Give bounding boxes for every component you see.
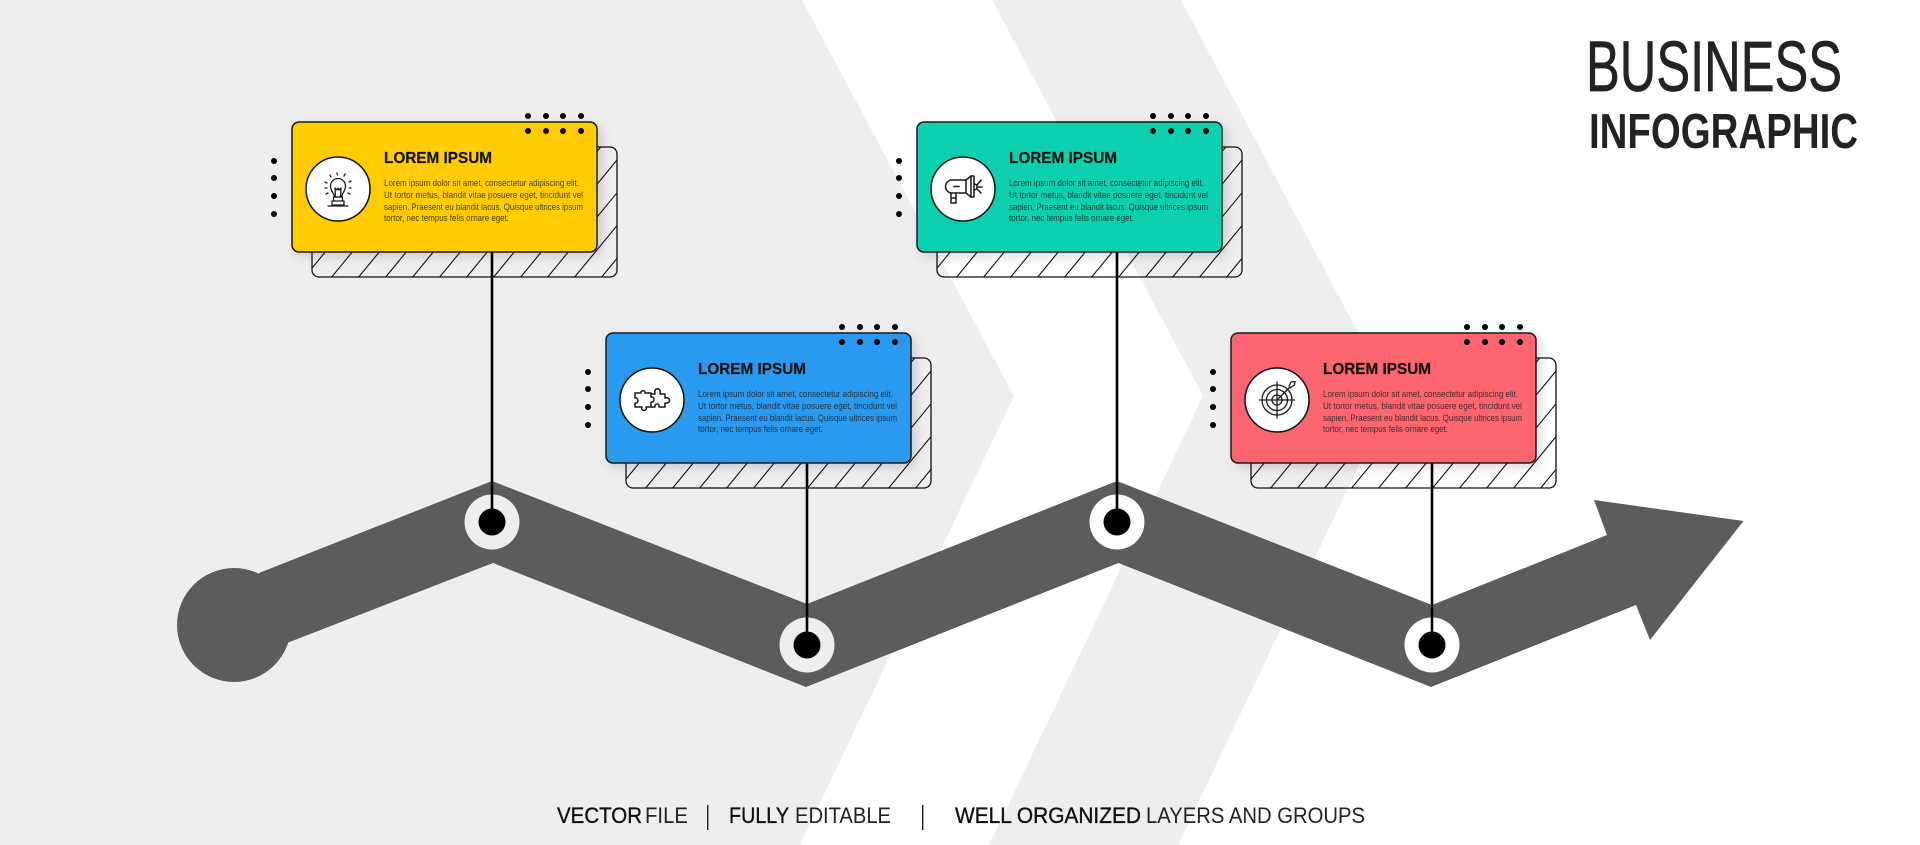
body text: Lorem ipsum dolor sit amet, consectetur adipiscing elit.	[1323, 388, 1518, 399]
footer caption	[557, 803, 1365, 830]
left dots	[585, 369, 591, 428]
left dots	[271, 158, 277, 217]
body text: sapien. Praesent eu blandit lacus. Quisque ultrices ipsum	[384, 201, 583, 212]
panel: step 1 yellow	[271, 113, 618, 278]
node 2 ring	[780, 618, 834, 672]
top dots	[1150, 113, 1209, 134]
panel: step 4 red	[1210, 324, 1557, 489]
footer caption: VECTOR	[557, 803, 642, 828]
card body	[292, 122, 597, 252]
icon: puzzle	[620, 368, 684, 432]
heading: LOREM IPSUM	[698, 361, 806, 378]
body text: sapien. Praesent eu blandit lacus. Quisque ultrices ipsum	[698, 412, 897, 423]
hatched back panel	[1250, 357, 1557, 489]
left dots	[896, 158, 902, 217]
icon: light bulb	[306, 157, 370, 221]
hatched back panel	[625, 357, 932, 489]
heading: LOREM IPSUM	[1323, 361, 1431, 378]
body text: sapien. Praesent eu blandit lacus. Quisque ultrices ipsum	[1323, 412, 1522, 423]
hatched back panel	[936, 146, 1243, 278]
body text: Ut tortor metus, blandit vitae posuere eget, tincidunt vel	[1323, 400, 1522, 411]
panel: step 2 blue	[585, 324, 932, 489]
footer caption: EDITABLE	[795, 803, 891, 828]
body text	[1009, 177, 1208, 223]
footer caption: WELL ORGANIZED	[955, 803, 1141, 828]
body text: Ut tortor metus, blandit vitae posuere eget, tincidunt vel	[698, 400, 897, 411]
heading: LOREM IPSUM	[384, 150, 492, 167]
hatched back panel	[311, 146, 618, 278]
zigzag arrow timeline	[177, 481, 1744, 687]
body text: Ut tortor metus, blandit vitae posuere eget, tincidunt vel	[1009, 189, 1208, 200]
icon: megaphone	[931, 157, 995, 221]
icon: target	[1245, 368, 1309, 432]
connector stem 3	[1104, 250, 1130, 536]
card body	[606, 333, 911, 463]
body text	[698, 388, 897, 434]
body text: Lorem ipsum dolor sit amet, consectetur adipiscing elit.	[698, 388, 893, 399]
body text: sapien. Praesent eu blandit lacus. Quisque ultrices ipsum	[1009, 201, 1208, 212]
top dots	[1464, 324, 1523, 345]
node 4 ring	[1404, 618, 1460, 672]
body text: Ut tortor metus, blandit vitae posuere eget, tincidunt vel	[384, 189, 583, 200]
body text	[1323, 388, 1522, 434]
node 1 ring	[464, 494, 520, 550]
body text: tortor, nec tempus felis ornare eget.	[1009, 212, 1134, 223]
card body	[1231, 333, 1536, 463]
body text: tortor, nec tempus felis ornare eget.	[1323, 423, 1448, 434]
left dots	[1210, 369, 1216, 428]
top dots	[525, 113, 584, 134]
connector stem 1	[478, 250, 506, 536]
footer caption: LAYERS AND GROUPS	[1146, 803, 1365, 828]
node 3 ring	[1090, 494, 1144, 550]
connector stem 4	[1418, 461, 1446, 658]
body text: Lorem ipsum dolor sit amet, consectetur adipiscing elit.	[384, 177, 579, 188]
connector stem 2	[794, 461, 820, 658]
card body	[917, 122, 1222, 252]
body text: tortor, nec tempus felis ornare eget.	[698, 423, 823, 434]
footer caption: FULLY	[729, 803, 789, 828]
top dots	[839, 324, 898, 345]
body text: Lorem ipsum dolor sit amet, consectetur adipiscing elit.	[1009, 177, 1204, 188]
heading: LOREM IPSUM	[1009, 150, 1117, 167]
body text	[384, 177, 583, 223]
panel: step 3 green	[896, 113, 1243, 278]
body text: tortor, nec tempus felis ornare eget.	[384, 212, 509, 223]
footer caption: FILE	[645, 803, 688, 828]
title	[1586, 28, 1858, 159]
